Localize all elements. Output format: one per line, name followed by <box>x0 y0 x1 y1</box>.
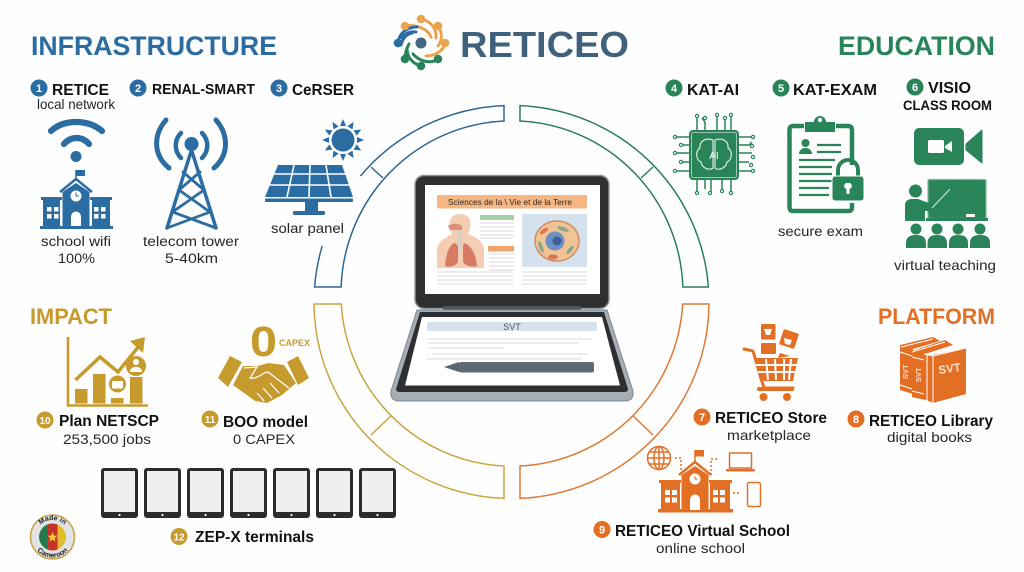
item 11 BOO model: 0 CAPEX <box>233 431 296 447</box>
item 11 BOO model: 11 <box>205 415 216 426</box>
caption: solar panel: solar panel <box>271 220 344 236</box>
icon: sun <box>322 119 364 161</box>
item 6 VISIO class room: 6 <box>912 82 918 94</box>
item 7 RETICEO Store <box>694 408 827 443</box>
icon: school <box>40 170 113 229</box>
caption: school wifi: 100% <box>58 250 95 266</box>
ring: platform arc <box>520 304 709 498</box>
item 3 CeRSER: 3 <box>276 83 282 95</box>
panel: impact <box>30 304 396 546</box>
item 12 ZEP-X terminals: 12 <box>173 532 185 544</box>
caption: school wifi: school wifi <box>41 233 111 249</box>
item 10 Plan NETSCP: 10 <box>39 416 51 427</box>
item 8 RETICEO Library: 8 <box>853 414 859 426</box>
badge: made in Cameroon: Made in <box>38 514 66 524</box>
icon: telecom tower <box>157 120 226 228</box>
item 7 RETICEO Store: 7 <box>699 412 705 424</box>
heading: platform: PLATFORM <box>878 304 995 329</box>
item 9 RETICEO Virtual School <box>594 521 790 556</box>
heading: education: EDUCATION <box>838 31 995 61</box>
item 3 CeRSER <box>270 80 354 99</box>
caption: secure exam: secure exam <box>778 223 863 239</box>
ring: infrastructure arc <box>315 106 504 287</box>
item 10 Plan NETSCP <box>36 412 159 447</box>
lungs illustration <box>437 214 484 268</box>
ring: impact arc <box>314 304 504 498</box>
item 10 Plan NETSCP: Plan NETSCP <box>59 413 159 430</box>
upper screen <box>415 176 609 310</box>
icon: growth chart <box>68 337 148 406</box>
item 9 RETICEO Virtual School: RETICEO Virtual School <box>615 523 790 540</box>
icon: video camera <box>914 128 982 165</box>
cell illustration <box>522 214 587 267</box>
icon: wifi <box>51 122 102 162</box>
icon: virtual teaching <box>905 180 990 248</box>
panel: platform <box>594 304 995 556</box>
item 2 RENAL-SMART: RENAL-SMART <box>152 82 255 98</box>
item 5 KAT-EXAM: 5 <box>778 83 784 95</box>
item 9 RETICEO Virtual School: online school <box>656 540 745 556</box>
item 3 CeRSER: CeRSER <box>292 82 354 99</box>
item 8 RETICEO Library: digital books <box>887 429 972 445</box>
item 9 RETICEO Virtual School: 9 <box>599 524 605 536</box>
item 4 KAT-AI: KAT-AI <box>687 82 739 99</box>
icon: library books: SVT <box>901 364 910 379</box>
icon: AI chip <box>673 113 755 195</box>
caption: telecom tower: 5-40km <box>165 250 218 266</box>
item 1 RETICE: 1 <box>36 83 42 95</box>
item 8 RETICEO Library: RETICEO Library <box>869 413 993 430</box>
panel: infrastructure <box>30 31 364 266</box>
item 2 RENAL-SMART <box>130 80 255 98</box>
item 10 Plan NETSCP: 253,500 jobs <box>63 431 151 447</box>
central laptop <box>391 176 633 401</box>
item 2 RENAL-SMART: 2 <box>135 83 141 95</box>
lower tablet: SVT <box>503 322 521 332</box>
item 6 VISIO class room: VISIO <box>928 80 971 97</box>
icon: zero capex handshake: CAPEX <box>279 338 311 349</box>
logo <box>394 15 629 70</box>
icon: store cart <box>744 324 799 401</box>
logo mark <box>394 15 449 70</box>
item 12 ZEP-X terminals: ZEP-X terminals <box>195 529 314 546</box>
icon: AI chip: AI <box>709 151 719 162</box>
item 8 RETICEO Library <box>848 410 993 445</box>
icon: library books: SVT <box>938 362 962 377</box>
lower tablet <box>391 310 633 401</box>
icon: virtual school network <box>648 446 760 512</box>
icon: secure exam clipboard <box>790 116 864 211</box>
heading: impact: IMPACT <box>30 304 112 329</box>
item 11 BOO model: BOO model <box>223 414 308 431</box>
badge: made in Cameroon <box>30 514 76 560</box>
logo wordmark: RETICEO <box>460 24 629 65</box>
badge: made in Cameroon: Cameroon <box>38 548 68 558</box>
item 11 BOO model <box>202 410 308 447</box>
icon: library books <box>900 337 966 403</box>
upper screen: Sciences de la \ Vie et de la Terre <box>448 197 572 207</box>
item 5 KAT-EXAM: KAT-EXAM <box>793 82 877 99</box>
item 7 RETICEO Store: RETICEO Store <box>715 410 827 427</box>
item 1 RETICE <box>30 80 116 112</box>
item 6 VISIO class room <box>903 78 992 113</box>
ZEP-X tablets row <box>101 468 396 518</box>
icon: solar panel <box>265 165 353 215</box>
caption: school wifi <box>41 233 111 266</box>
item 5 KAT-EXAM <box>772 80 877 99</box>
icon: zero capex handshake <box>218 318 311 403</box>
caption: telecom tower: telecom tower <box>143 233 239 249</box>
icon: zero capex handshake: 0 <box>250 318 277 366</box>
icon: library books: SVT <box>914 367 923 382</box>
caption: virtual teaching: virtual teaching <box>894 257 996 273</box>
stylus <box>444 362 594 372</box>
caption: telecom tower <box>143 233 239 266</box>
ring: education arc <box>520 106 708 287</box>
item 1 RETICE: RETICE <box>52 82 109 99</box>
panel: education <box>666 31 996 273</box>
item 1 RETICE: local network <box>37 96 116 112</box>
heading: infrastructure: INFRASTRUCTURE <box>31 31 277 61</box>
item 4 KAT-AI: 4 <box>671 83 678 95</box>
item 7 RETICEO Store: marketplace <box>727 427 811 443</box>
item 4 KAT-AI <box>666 80 739 99</box>
item 6 VISIO class room: CLASS ROOM <box>903 98 992 113</box>
